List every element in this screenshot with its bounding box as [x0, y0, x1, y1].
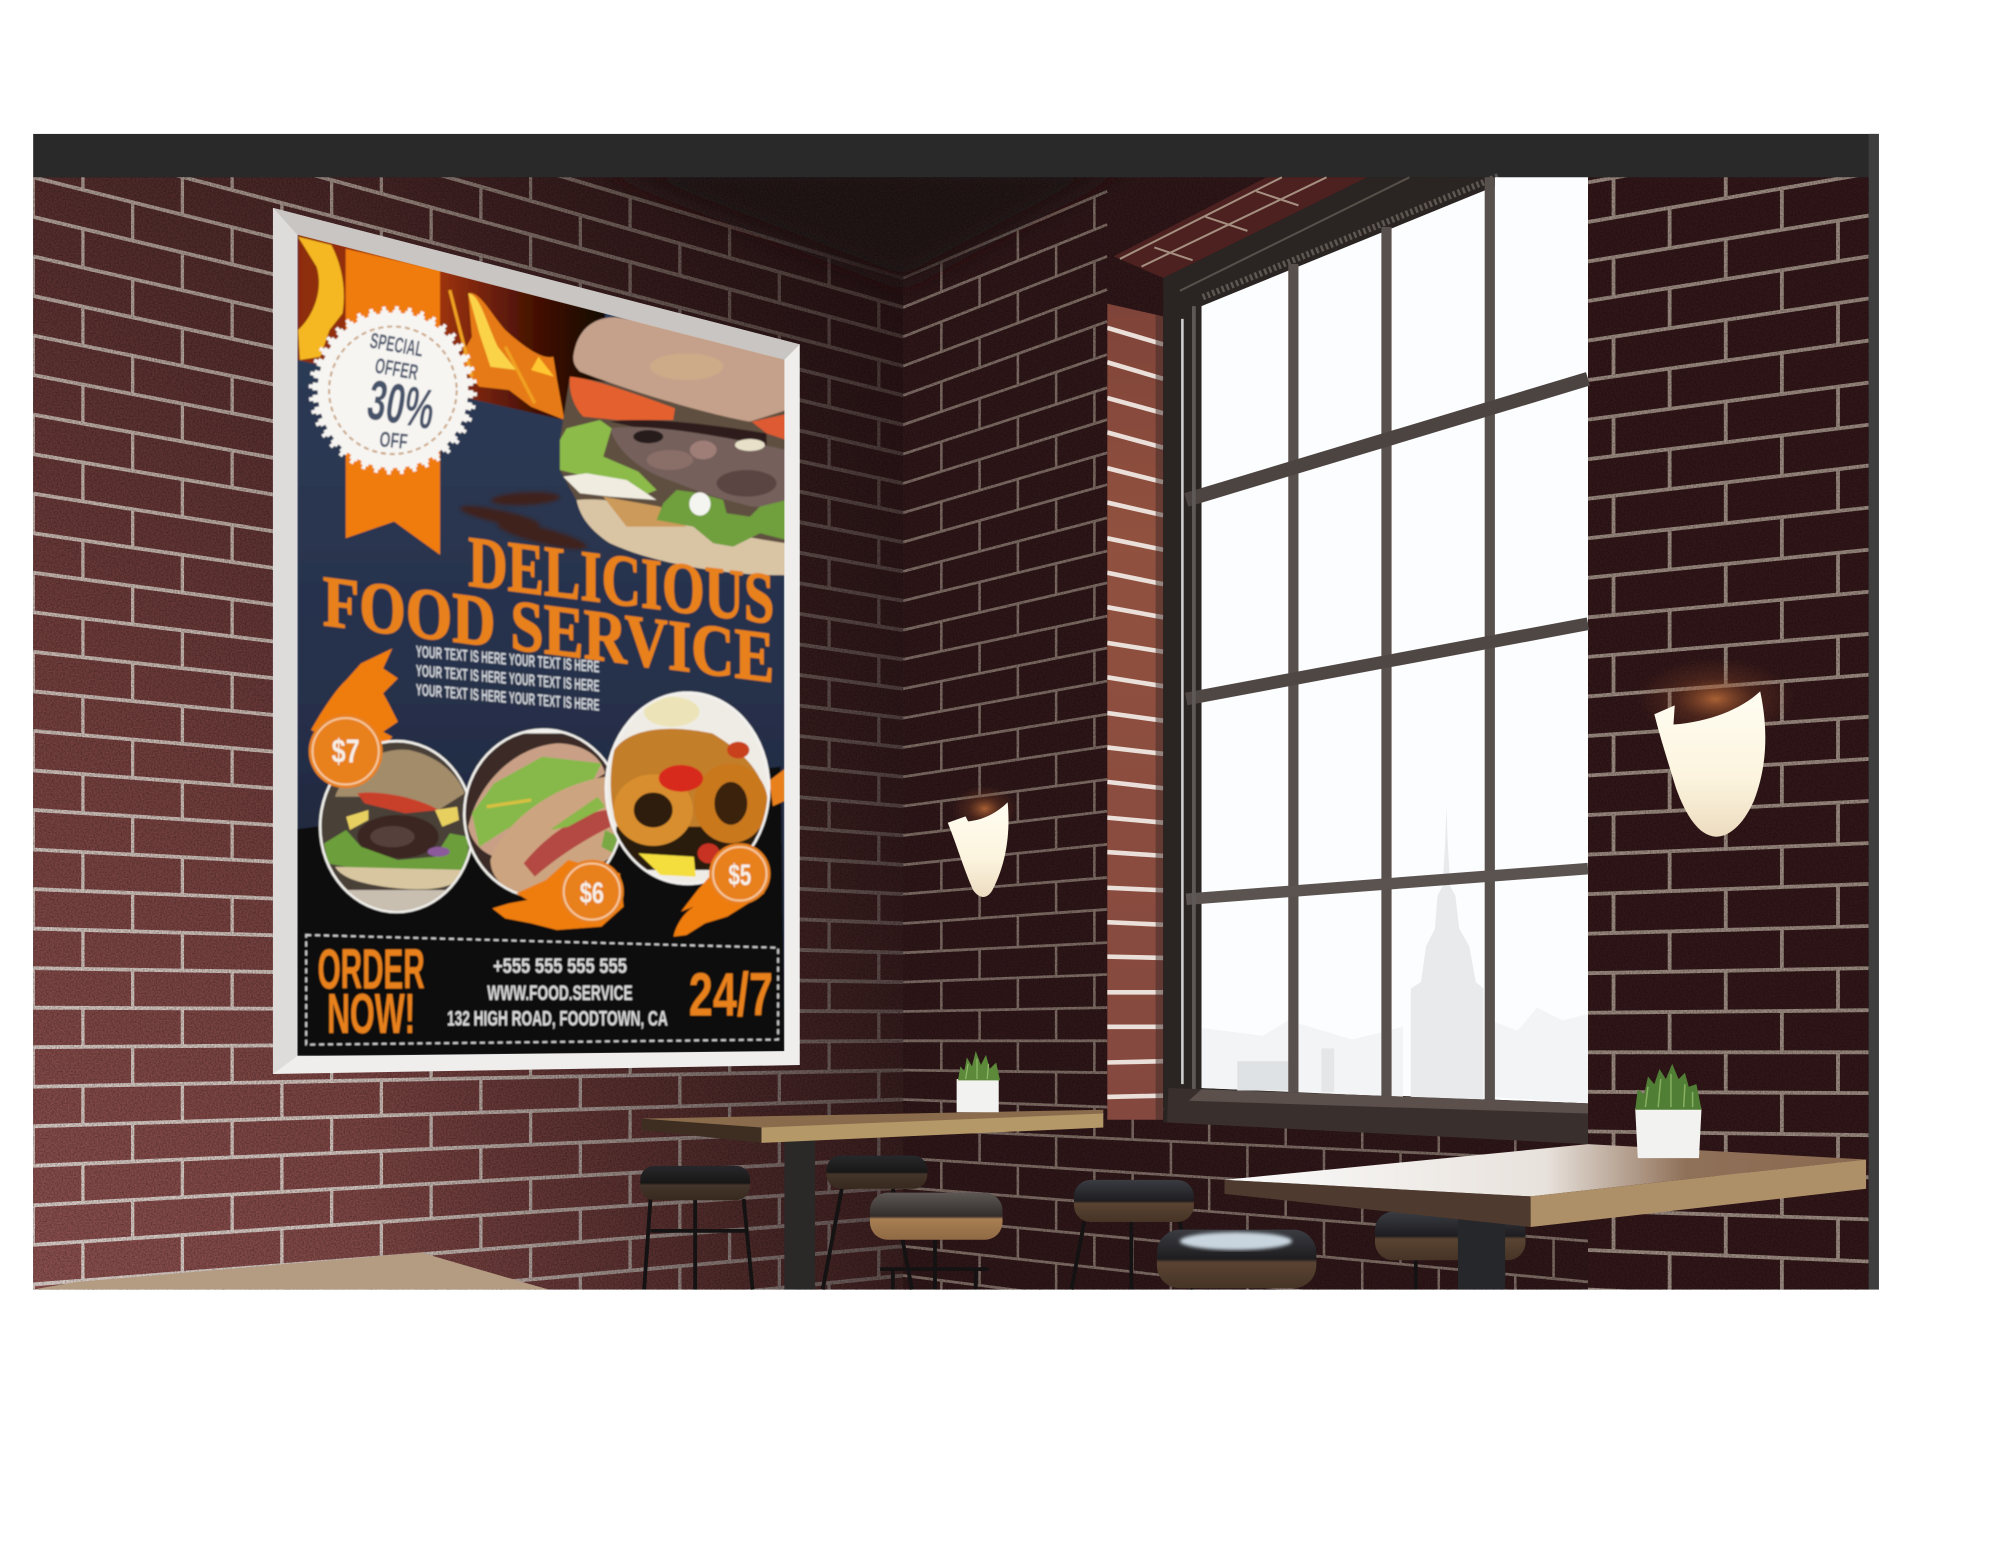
window [1163, 176, 1588, 1144]
contact details [447, 953, 668, 1031]
flame top left [311, 648, 398, 753]
badge text: OFFER [373, 353, 420, 385]
body text: YOUR TEXT IS HERE YOUR TEXT IS HERE [416, 642, 599, 676]
order now [317, 948, 426, 1035]
price badge $6 [560, 860, 624, 923]
right table [1224, 1144, 1866, 1290]
footer dashed box [306, 935, 778, 1045]
black lower area [297, 767, 784, 1056]
window mullions [1182, 177, 1588, 1102]
contact details: WWW.FOOD.SERVICE [487, 980, 633, 1005]
fire background [298, 233, 605, 430]
window glass [1202, 177, 1588, 1103]
flame under $6 [492, 860, 624, 930]
poster [273, 208, 800, 1074]
restaurant scene with poster [33, 134, 1879, 1290]
contact details: +555 555 555 555 [493, 953, 627, 978]
flame under $5 [672, 876, 766, 938]
order now: NOW! [327, 982, 415, 1045]
stools [640, 1156, 1526, 1290]
poster artwork [297, 233, 787, 1056]
food photo: onion rings [605, 691, 775, 890]
hero burger [560, 317, 787, 575]
plant right [1635, 1064, 1702, 1158]
stool left [640, 1166, 750, 1200]
heading: FOOD SERVICE [323, 560, 774, 698]
price badge $5 [709, 843, 770, 904]
stool right of table [1074, 1180, 1194, 1222]
ribbon [346, 249, 440, 555]
window sill [1167, 1088, 1588, 1144]
wall lamp right [1636, 658, 1795, 837]
bench at bottom left [33, 1253, 548, 1290]
small orange accent [769, 769, 784, 806]
stool back [827, 1156, 927, 1189]
stool centre [870, 1193, 1003, 1240]
brick soffit above window [1114, 177, 1367, 278]
skyscraper [1411, 806, 1483, 1099]
badge text: SPECIAL [368, 328, 425, 362]
food photo: burger [317, 740, 479, 920]
distant skyline [1202, 1008, 1588, 1103]
stool foreground [1157, 1230, 1316, 1288]
price badge $7 [309, 714, 383, 788]
right brick wall [1588, 131, 1869, 1327]
body text [416, 642, 599, 715]
heading [323, 521, 774, 698]
badge text [366, 332, 434, 450]
slate background [297, 235, 784, 1056]
body text: YOUR TEXT IS HERE YOUR TEXT IS HERE [416, 661, 599, 696]
left table [642, 1110, 1103, 1290]
middle and lower brick wall [903, 177, 1588, 1364]
poster white frame [273, 208, 800, 1074]
chilli garnish [459, 491, 588, 554]
brick pillar [1107, 286, 1163, 1120]
food photo: hot dogs [461, 728, 627, 907]
badge text: OFF [378, 426, 409, 454]
wall lamp left [948, 786, 1018, 897]
hours: 24/7 [689, 960, 773, 1028]
stool legs [644, 1189, 1416, 1290]
price badge $5: $5 [728, 859, 751, 892]
stool under right table [1375, 1212, 1526, 1260]
heading: DELICIOUS [468, 521, 774, 640]
window frame [1163, 177, 1588, 1122]
left brick wall [33, 177, 903, 1290]
badge [311, 309, 474, 472]
photo frame: top bar and right strip [33, 134, 1879, 1290]
price badge $6: $6 [580, 877, 604, 910]
price badge $7: $7 [332, 734, 360, 771]
window head detail [1203, 176, 1499, 297]
body text: YOUR TEXT IS HERE YOUR TEXT IS HERE [416, 680, 599, 715]
texture noise over walls [33, 177, 1869, 1290]
badge text: 30% [363, 367, 439, 441]
contact details: 132 HIGH ROAD, FOODTOWN, CA [447, 1006, 668, 1031]
order now: ORDER [318, 938, 425, 1001]
ceiling corner [631, 178, 1107, 282]
plant left [957, 1051, 1000, 1112]
